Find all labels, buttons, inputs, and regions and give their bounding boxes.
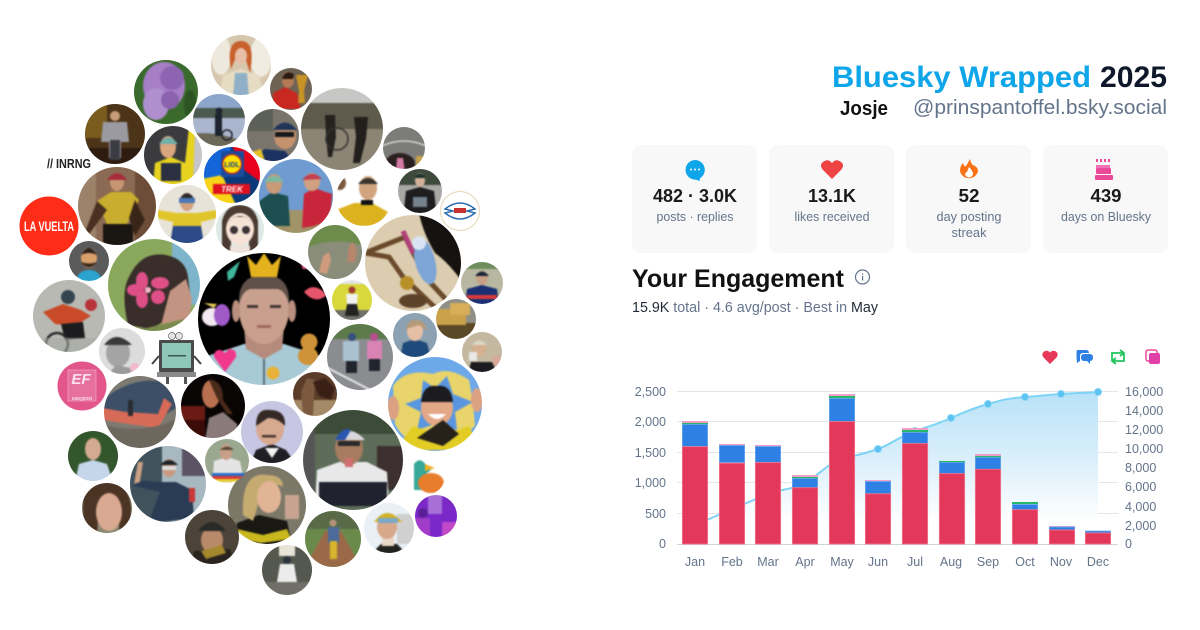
left axis labels: 2,500 <box>635 385 666 399</box>
avatar: rider on forest path <box>299 505 367 573</box>
left axis labels: 1,500 <box>635 446 666 460</box>
right axis labels <box>1125 385 1163 551</box>
avatar: house with field <box>436 299 476 339</box>
icon: replies <box>1076 350 1093 364</box>
avatar: man in winter jacket <box>398 169 442 213</box>
icon: likes <box>1042 351 1058 364</box>
right axis labels: 8,000 <box>1125 461 1156 475</box>
stat card: likes <box>769 145 894 253</box>
stat card: streak: day posting <box>936 210 1002 224</box>
avatar: cartoon robot television <box>152 332 201 384</box>
icon: flame <box>960 159 978 178</box>
month labels: Jul <box>907 555 923 569</box>
avatar: rider with yellow bus <box>332 280 372 320</box>
avatar: young rider with yellow helmet <box>359 498 419 558</box>
logo: INRNG: // INRNG <box>47 156 91 171</box>
left axis labels: 500 <box>645 507 666 521</box>
avatar: Lidl Trek logo <box>204 147 260 203</box>
avatar: rider on cobbles <box>257 540 317 600</box>
handle: @prinspantoffel.bsky.social <box>913 97 1167 119</box>
month labels: Nov <box>1050 555 1073 569</box>
chart legend icons <box>1042 350 1160 364</box>
stat card: streak: 52 <box>958 186 980 206</box>
avatar: bike by the lake <box>193 94 245 146</box>
icon: reposts <box>1112 350 1124 364</box>
avatar: road cyclist in orange <box>33 280 105 352</box>
month labels <box>685 555 1109 569</box>
avatar: team rider with sponsor board <box>461 262 503 304</box>
month labels: Oct <box>1015 555 1035 569</box>
right axis labels: 16,000 <box>1125 385 1163 399</box>
stacked bars: quotes <box>682 394 1075 527</box>
stat card: posts and replies: 482 · 3.0K <box>653 186 737 206</box>
sticker: lips <box>304 287 327 299</box>
avatar: cartoon bearded man <box>69 241 109 281</box>
avatar: Perry and pumpkin <box>413 459 444 494</box>
logo: EF Education: EF <box>71 371 91 388</box>
avatar: black and white woman with cap <box>94 323 150 379</box>
avatar: man in waistcoat <box>85 104 145 164</box>
stacked bars: likes <box>682 422 1111 544</box>
right axis labels: 12,000 <box>1125 423 1163 437</box>
avatar: rider with tongue out in Red Bull kit <box>303 410 403 510</box>
stat card: likes: likes received <box>794 210 870 224</box>
stat card: days on Bluesky: days on Bluesky <box>1061 210 1152 224</box>
avatar: clean-cut man in tuxedo <box>236 396 308 468</box>
engagement summary: 15.9K total · 4.6 avg/post · Best in May <box>632 300 879 316</box>
right axis labels: 14,000 <box>1125 404 1163 418</box>
right axis labels: 2,000 <box>1125 519 1156 533</box>
title: Bluesky Wrapped <box>832 61 1091 94</box>
sticker: cat <box>266 366 280 380</box>
avatar: FDJ rider celebrating <box>124 440 212 528</box>
avatar: woman with horse <box>293 372 337 416</box>
grid lines <box>677 392 1118 544</box>
avatar: rider in yellow with cap, cut out <box>337 175 388 226</box>
avatar: main profile, man with emoji stickers <box>198 253 330 385</box>
avatar: lilac flowers <box>134 60 198 124</box>
month labels: Jun <box>868 555 888 569</box>
avatar: rider in yellow, arm raised <box>144 126 202 184</box>
sticker: parrot <box>227 261 240 281</box>
engagement chart <box>635 385 1163 569</box>
month labels: Feb <box>721 555 743 569</box>
avatar: grey car interior <box>383 127 425 169</box>
icon: heart <box>821 160 843 179</box>
logo: round emblem <box>440 192 480 230</box>
sticker: heart <box>214 349 236 372</box>
avatar: rider with rainbow jersey <box>201 435 253 487</box>
icon: quotes <box>1146 350 1160 364</box>
avatar: two riders by coast <box>259 159 333 233</box>
avatar: cyclist with sunglasses selfie <box>247 109 299 161</box>
cumulative points <box>874 388 1102 452</box>
avatar: Lidl Trek logo: LIDL <box>224 162 240 169</box>
avatar: man with trophy <box>270 68 312 110</box>
left axis labels <box>635 385 666 551</box>
avatar: muddy cyclocross race <box>301 88 383 170</box>
cumulative line <box>695 392 1098 525</box>
avatar: smiling rider in yellow with star cutout <box>388 357 482 451</box>
stat card: posts and replies <box>632 145 757 253</box>
logo: EF Education <box>58 362 106 410</box>
avatar: woman with Miffy wall <box>211 35 271 95</box>
avatar: two riders on road <box>327 324 393 390</box>
avatar: man with mug <box>462 332 502 372</box>
logo: La Vuelta: LA VUELTA <box>24 218 74 234</box>
right axis labels: 4,000 <box>1125 500 1156 514</box>
avatar: thumbs up in flooded field <box>308 225 362 279</box>
stacked bars: reposts <box>682 396 1038 504</box>
avatar: Lidl Trek logo: TREK <box>221 185 244 194</box>
left axis labels: 2,000 <box>635 415 666 429</box>
month labels: May <box>830 555 855 569</box>
right axis labels: 6,000 <box>1125 480 1156 494</box>
right axis labels: 0 <box>1125 537 1132 551</box>
avatar: purple duotone <box>410 490 462 542</box>
cumulative area <box>695 392 1098 544</box>
icon: cake <box>1095 159 1113 180</box>
avatar: woman with dark hair <box>77 478 137 538</box>
icon: info <box>856 270 870 284</box>
section heading: Your Engagement <box>632 265 845 293</box>
avatar: blonde woman in yellow pattern <box>221 459 313 551</box>
left axis labels: 1,000 <box>635 476 666 490</box>
stat card: days on Bluesky: 439 <box>1090 186 1122 206</box>
title: 2025 <box>1100 61 1167 94</box>
avatar: rider eating a burger <box>180 505 244 569</box>
avatar: rider in Visma kit against wall <box>78 167 156 245</box>
month labels: Jan <box>685 555 705 569</box>
month labels: Mar <box>757 555 779 569</box>
sticker: bear <box>298 334 318 365</box>
avatar: rider arms out <box>158 185 216 243</box>
avatar: woman with pink flower in hair <box>108 239 200 331</box>
avatar: bald man in white shirt, green hedge <box>63 426 123 486</box>
display name: Josje <box>840 98 888 120</box>
sticker: crown <box>247 253 281 277</box>
stat card: streak: streak <box>952 226 987 240</box>
logo: EF Education: easypost <box>72 396 93 402</box>
right axis labels: 10,000 <box>1125 442 1163 456</box>
stat card: streak <box>906 145 1031 253</box>
stat card: likes: 13.1K <box>808 186 856 206</box>
stacked bars: replies <box>682 398 1111 534</box>
avatar: bearded singer in dark red <box>175 368 251 444</box>
stat card: posts and replies: posts · replies <box>656 210 734 224</box>
month labels: Dec <box>1087 555 1109 569</box>
avatar: budgie on perch <box>365 215 461 311</box>
icon: speech bubble <box>686 160 705 181</box>
avatar: woman with hand in hair <box>393 313 437 357</box>
logo: La Vuelta <box>20 196 78 256</box>
avatar bubble cluster <box>20 25 508 600</box>
month labels: Apr <box>795 555 815 569</box>
month labels: Sep <box>977 555 999 569</box>
avatar: cyclocross crowd and mud <box>98 370 182 454</box>
avatar: anime girl <box>216 205 264 253</box>
month labels: Aug <box>940 555 962 569</box>
sticker: unicorn <box>202 303 230 326</box>
stat card: days on Bluesky <box>1043 145 1168 253</box>
left axis labels: 0 <box>659 537 666 551</box>
